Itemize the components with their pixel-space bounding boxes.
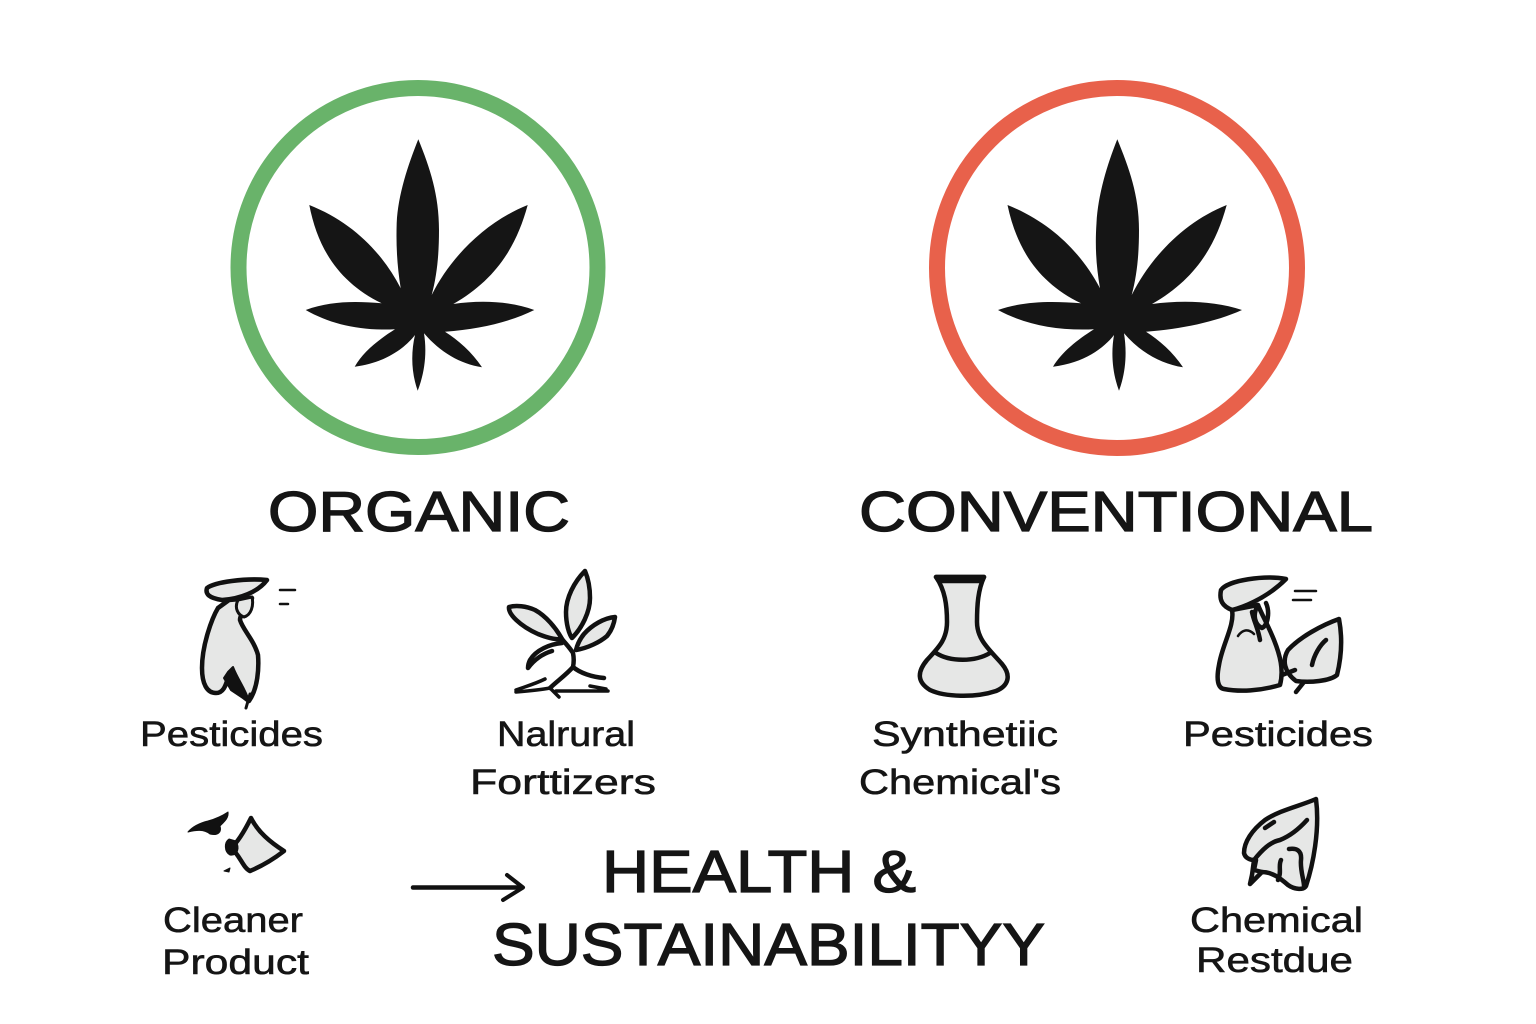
label: natural fertilizers: [470, 714, 656, 802]
panel: organic: [238, 88, 598, 544]
arrow: [413, 875, 523, 900]
item: chemical residue: [1190, 799, 1363, 980]
label: pesticides: Pesticides: [1183, 714, 1373, 754]
icon: organic leaf: [306, 139, 534, 391]
label: chemical residue: Chemical: [1190, 900, 1363, 940]
heading: health and sustainability: SUSTAINABILITYY: [492, 912, 1045, 978]
label: chemical residue: Restdue: [1196, 940, 1353, 980]
icon: plant sprout: [509, 571, 615, 697]
label: synthetic chemicals: Chemical's: [859, 762, 1061, 802]
label: pesticides: Pesticides: [140, 714, 323, 754]
icon: spray nozzle: [188, 812, 284, 872]
label: synthetic chemicals: Synthetiic: [872, 714, 1058, 754]
label: cleaner product: [162, 900, 309, 982]
heading: organic: ORGANIC: [268, 480, 570, 544]
icon: spray bottle: [202, 579, 295, 708]
item: conventional pesticides: [1183, 578, 1373, 754]
panel: conventional: [859, 88, 1373, 544]
icon: spray bottle with leaf: [1218, 578, 1341, 692]
heading: health and sustainability: HEALTH &: [602, 839, 916, 905]
icon: conventional leaf: [998, 139, 1242, 391]
label: cleaner product: Product: [162, 942, 309, 982]
label: natural fertilizers: Forttizers: [470, 762, 656, 802]
item: cleaner product: [162, 812, 309, 982]
heading: health and sustainability: [492, 839, 1045, 978]
icon: leaf with residue: [1244, 799, 1317, 889]
item: natural fertilizers: [470, 571, 656, 802]
label: synthetic chemicals: [859, 714, 1061, 802]
ring: green circle: [238, 88, 598, 447]
ring: red circle: [937, 88, 1297, 448]
item: organic pesticides: [140, 579, 323, 754]
heading: conventional: CONVENTIONAL: [859, 480, 1373, 544]
label: chemical residue: [1190, 900, 1363, 980]
item: synthetic chemicals: [859, 577, 1061, 802]
label: cleaner product: Cleaner: [163, 900, 303, 940]
label: natural fertilizers: Nalrural: [497, 714, 635, 754]
icon: flask: [920, 577, 1008, 696]
